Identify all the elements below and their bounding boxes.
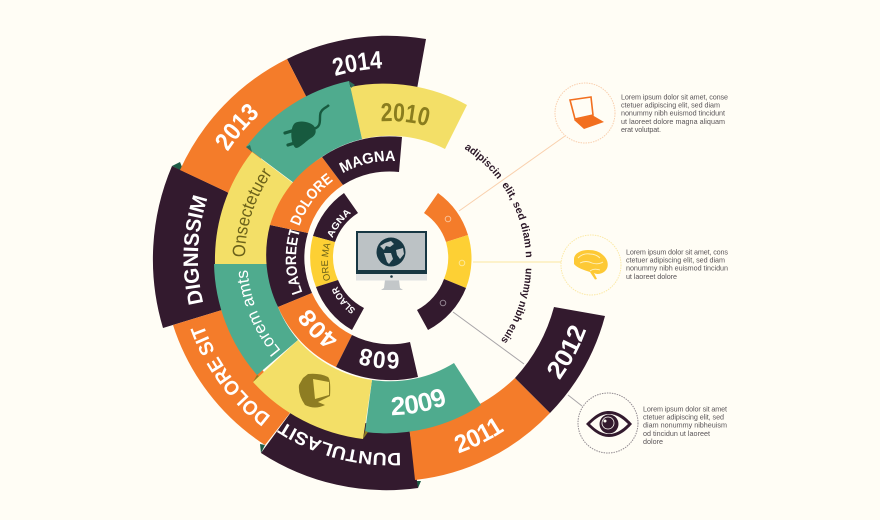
segment: 2013: 2013: [216, 104, 258, 152]
icon circle: laptop: [555, 83, 615, 143]
panel: outer ring: [152, 36, 630, 490]
text block: brain: ut laoreet dolore: [626, 272, 677, 281]
node markers: [440, 216, 465, 306]
segment: DOLORE: [270, 157, 343, 233]
callout: laptop: [555, 83, 728, 143]
segment: Onsectetuer: Onsectetuer: [232, 168, 270, 256]
icon circle: eye: [578, 393, 638, 453]
text block: eye: diam nonummy nibheuism: [643, 421, 727, 430]
segment: 2010: [350, 84, 467, 149]
connector line: eye: [453, 312, 582, 406]
segment: LAOREET: [266, 225, 312, 307]
segment: monitor: [253, 340, 372, 439]
segment: 2011: [410, 378, 550, 480]
panel: inner ring right: [417, 193, 472, 330]
segment: 2013: [180, 59, 306, 193]
panel: second ring: [266, 136, 418, 380]
curved caption: [464, 144, 532, 343]
segment: Onsectetuer: [214, 152, 292, 264]
text block: brain: Lorem ipsum dolor sit amet, cons: [626, 248, 728, 256]
segment: orange: [424, 193, 468, 242]
connector line: brain: [473, 261, 561, 263]
segment: dark: [417, 279, 466, 330]
segment: SLAOR: SLAOR: [332, 286, 355, 314]
text block: eye: ctetuer adipiscing elit, sed: [643, 412, 724, 422]
text block: laptop: [621, 92, 728, 134]
segment: DOLORE SIT: DOLORE SIT: [190, 328, 270, 426]
icon: brain: [574, 250, 608, 280]
segment: Lorem amts: [214, 264, 298, 375]
segment: DOLORE: DOLORE: [290, 172, 333, 226]
segment: DOLORE SIT: [173, 310, 290, 445]
segment: 2014: [287, 36, 426, 96]
segment: AGNA: AGNA: [328, 210, 351, 238]
text block: laptop: nonummy nibh euismod tincidunt: [621, 109, 725, 118]
segment: DIGNISSIM: DIGNISSIM: [183, 195, 208, 305]
segment: DUNTULASIT: DUNTULASIT: [277, 424, 400, 466]
icon: desktop monitor with globe: [356, 232, 427, 290]
segment: 408: [278, 293, 352, 367]
caption: adipiscin: adipiscin: [464, 144, 502, 179]
segment: DIGNISSIM: [152, 166, 228, 328]
text block: laptop: ctetuer adipiscing elit, sed diam: [621, 100, 720, 110]
segment: plug: [246, 81, 362, 183]
segment: ORE MA: ORE MA: [321, 244, 330, 281]
segment: 608: 608: [359, 348, 399, 369]
text block: eye: [643, 404, 727, 446]
text block: brain: [626, 248, 728, 281]
segment: 2010: 2010: [382, 103, 430, 126]
text block: brain: nonummy nibh euismod tincidun: [626, 264, 728, 273]
segment: DUNTULASIT: [261, 413, 418, 490]
segment: 2009: [365, 363, 481, 434]
segment: Lorem amts: Lorem amts: [238, 270, 280, 357]
caption: elit, sed diam n: elit, sed diam n: [502, 182, 532, 258]
text block: eye: dolore: [643, 437, 663, 446]
panel: third ring: [214, 81, 481, 439]
caption: ummy nibh euis: ummy nibh euis: [502, 268, 532, 343]
segment: MAGNA: [322, 136, 402, 185]
callout: eye: [578, 393, 727, 453]
segment: MAGNA: MAGNA: [338, 150, 396, 173]
connector line: laptop: [459, 136, 565, 211]
text block: laptop: erat volutpat.: [621, 125, 661, 134]
text block: eye: Lorem ipsum dolor sit amet: [643, 404, 727, 414]
segment shadow tabs: [172, 162, 421, 488]
segment: LAOREET: LAOREET: [286, 229, 302, 295]
segment: 408: 408: [298, 310, 337, 346]
segment: 2014: 2014: [332, 51, 382, 76]
segment: amber: [444, 235, 472, 288]
icon: laptop: [570, 97, 604, 129]
text block: laptop: Lorem ipsum dolor sit amet, conse: [621, 92, 728, 102]
text block: laptop: ut laoreet dolore magna aliquam: [621, 117, 725, 126]
icon: plug: [285, 105, 329, 148]
segment: 2012: [515, 307, 605, 413]
segment: 2012: 2012: [548, 326, 586, 380]
text block: brain: ctetuer adipiscing elit, sed diam: [626, 256, 725, 264]
segment: 608: [336, 335, 418, 380]
segment: 2011: 2011: [454, 418, 504, 454]
icon: CRT monitor: [299, 374, 330, 408]
callout: brain: [561, 235, 728, 295]
icon circle: brain: [561, 235, 621, 295]
panel: inner ring left: [310, 193, 364, 330]
segment: 2009: 2009: [392, 389, 445, 416]
text block: eye: od tincidun ut laoreet: [643, 429, 710, 438]
icon: eye: [586, 411, 632, 437]
